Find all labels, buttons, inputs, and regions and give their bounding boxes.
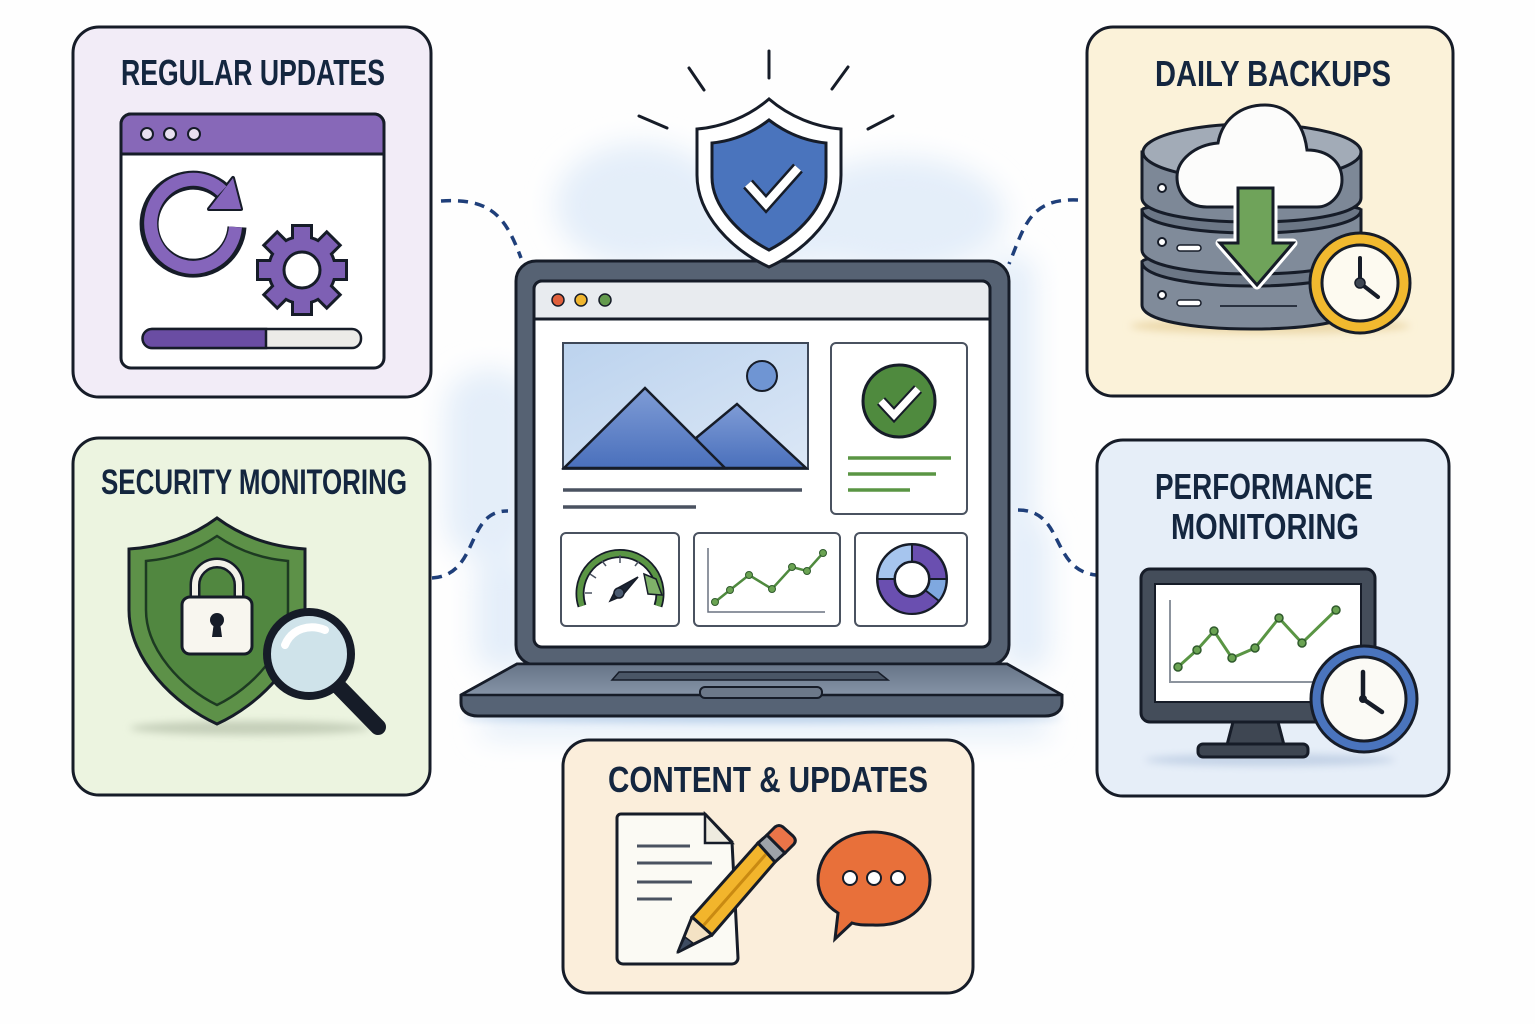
background wash	[445, 143, 1050, 738]
icon: document and pencil	[617, 814, 795, 964]
connector: daily backups	[1009, 200, 1078, 264]
panel: performance monitoring	[1097, 440, 1449, 796]
icon: update window	[121, 114, 384, 368]
panel: security monitoring	[73, 438, 430, 795]
heading: performance monitoring	[1155, 466, 1373, 547]
panel: regular updates	[73, 27, 431, 397]
donut chart card	[855, 533, 967, 626]
heading: content and updates: CONTENT & UPDATES	[608, 759, 928, 800]
icon: gear	[256, 224, 348, 316]
icon: shield with lock and magnifier	[129, 518, 378, 735]
connector: performance monitoring	[1018, 510, 1096, 575]
icon: server, cloud, clock	[1130, 105, 1410, 334]
icon: monitor with chart and clock	[1141, 569, 1417, 766]
laptop lid	[516, 261, 1009, 665]
heading: performance monitoring: MONITORING	[1171, 506, 1359, 547]
gauge card	[561, 533, 679, 626]
line chart card	[694, 533, 840, 626]
icon: speech bubble	[818, 832, 930, 939]
heading: security monitoring: SECURITY MONITORING	[101, 463, 407, 502]
panel: daily backups	[1087, 27, 1453, 396]
connector: security monitoring	[432, 511, 508, 578]
status card	[831, 343, 967, 514]
image placeholder	[563, 343, 808, 507]
heading: performance monitoring: PERFORMANCE	[1155, 466, 1373, 507]
heading: daily backups: DAILY BACKUPS	[1155, 53, 1391, 94]
panel: content and updates	[563, 740, 973, 993]
central laptop	[461, 261, 1062, 723]
heading: regular updates: REGULAR UPDATES	[121, 52, 385, 93]
laptop base	[461, 664, 1062, 716]
browser screen	[534, 281, 990, 647]
central shield with rays	[639, 51, 893, 267]
connector: regular updates	[441, 201, 521, 258]
